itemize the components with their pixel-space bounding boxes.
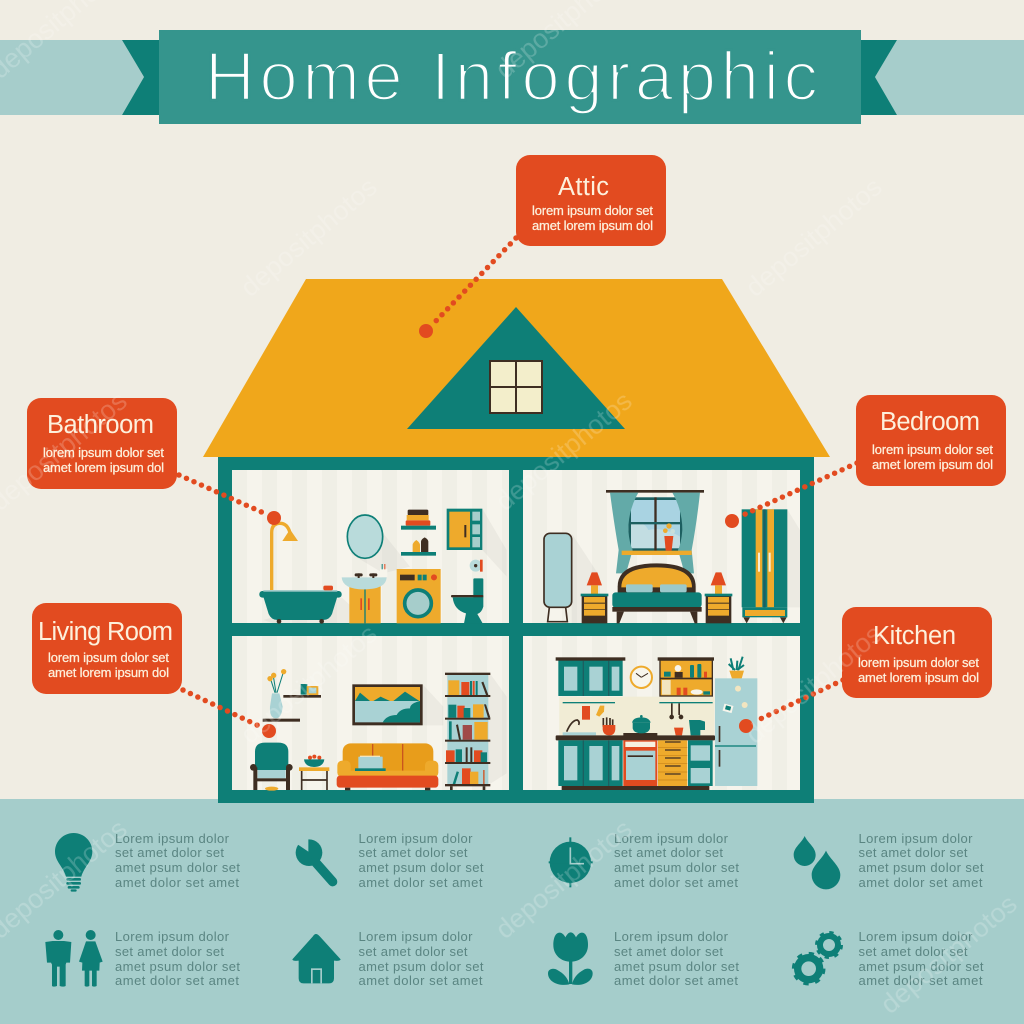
right nightstand with lamp [705,572,732,623]
text block: bulb: Lorem ipsum dolor [115,831,230,846]
wall clock [631,667,652,688]
text block: people: Lorem ipsum dolor [115,929,230,944]
header banner [0,30,1024,124]
text block: gears: set amet dolor set [858,944,968,959]
curtain rod [606,490,704,493]
upper wall shelf [283,684,321,698]
toilet [451,578,483,623]
knife block [603,717,615,735]
connector: kitchen [739,680,843,733]
watermark: depositphotos [490,814,638,945]
room: kitchen [556,657,757,790]
text block: wrench: amet dolor set amet [358,875,483,890]
mirror [544,533,572,622]
text block: house: amet psum dolor set [358,959,484,974]
watermark: depositphotos [490,386,638,517]
title: Home Infographic [205,38,818,115]
callout: bedroom [856,395,1006,486]
text block: people: amet dolor set amet [115,973,239,988]
house [203,279,830,803]
text block: bulb: amet psum dolor set [115,860,240,875]
callout: bedroom: Bedroom [880,408,980,436]
shower [272,523,298,590]
cup [674,728,683,735]
text block: drops: Lorem ipsum dolor [858,831,973,846]
bed [612,563,702,623]
text block: clock: amet dolor set amet [614,875,738,890]
callout: living room: amet lorem ipsum dol [48,665,169,680]
text block: tulip: amet dolor set amet [614,973,738,988]
text block: wrench: amet psum dolor set [358,860,484,875]
callout: bedroom: lorem ipsum dolor set [872,442,993,457]
text block: wrench [358,831,484,890]
hanging rails [563,702,713,720]
drawers [658,740,687,786]
text block: drops: set amet dolor set [858,845,968,860]
text block: wrench: set amet dolor set [358,845,468,860]
potted plant [729,657,744,679]
bathtub [259,586,342,624]
wall cabinet [447,509,482,550]
mirror [347,515,383,558]
connector: attic [419,238,516,338]
right ribbon tail [861,40,1024,115]
text block: clock: set amet dolor set [614,845,723,860]
text block: clock: Lorem ipsum dolor [614,831,729,846]
watermark: depositphotos [740,619,888,750]
window sill and vase [622,523,692,555]
washing machine [397,569,441,623]
roof [203,279,830,457]
bookcase [445,673,490,790]
icon: clock [549,837,593,887]
connector: bathroom [179,475,281,525]
text block: clock [614,831,739,890]
text block: gears: Lorem ipsum dolor [858,929,973,944]
callout: attic [516,155,666,246]
text block: gears: amet psum dolor set [858,959,984,974]
callout: bathroom: amet lorem ipsum dol [43,460,164,475]
bottom icons left half [45,833,341,987]
text block: drops [858,831,984,890]
text block: clock: amet psum dolor set [614,860,739,875]
plinth [562,786,709,790]
open shelf [658,657,714,696]
watermark: depositphotos [740,172,888,303]
vase with flowers [267,669,286,718]
room: bathroom [259,509,507,624]
wardrobe [742,509,787,623]
room: bedroom [544,490,800,623]
icon: light bulb [55,833,92,892]
text block: tulip: Lorem ipsum dolor [614,929,729,944]
sink [342,564,387,623]
callout: bathroom: Bathroom [47,411,154,439]
fridge [715,678,757,786]
soft shadows [352,673,507,785]
text block: house: set amet dolor set [358,944,468,959]
connector: bedroom [725,463,857,528]
right base cabinet [688,740,713,786]
text block: house: amet dolor set amet [358,973,483,988]
watermark: depositphotos [235,619,383,750]
callout: kitchen: amet lorem ipsum dol [858,670,979,685]
lower cabinets [558,740,623,786]
icon: gears [793,932,842,984]
towel shelf [401,510,436,530]
text block: tulip: amet psum dolor set [614,959,739,974]
text block: wrench: Lorem ipsum dolor [358,831,473,846]
text block: bulb [115,831,240,890]
text block: house [358,929,484,988]
laptop on sofa [355,756,386,771]
callout: bathroom: lorem ipsum dolor set [43,445,164,460]
icon: small house [292,934,341,983]
text block: house: Lorem ipsum dolor [358,929,473,944]
callout: kitchen: Kitchen [873,622,956,650]
bottle shelf [401,537,436,556]
callout: attic: lorem ipsum dolor set [532,203,653,218]
text block: gears: amet dolor set amet [858,973,983,988]
text block: tulip [614,929,739,988]
title plate [159,30,861,124]
callout: attic: amet lorem ipsum dol [532,218,653,233]
callout: kitchen: lorem ipsum dolor set [858,655,979,670]
kettle [689,720,705,735]
callout: living room: Living Room [38,618,173,646]
dotted connectors [179,238,857,738]
bottom icons right half [548,836,842,985]
text block: bulb: set amet dolor set [115,845,224,860]
icon: man and woman [45,930,103,987]
left nightstand with lamp [581,572,608,623]
text block: gears [858,929,984,988]
text block: people: amet psum dolor set [115,959,240,974]
cooking pot [623,715,657,736]
text block: people [115,929,240,988]
connector: living room [183,690,276,738]
bottom info band [0,799,1024,1024]
left ribbon tail [0,40,159,115]
watermark: depositphotos [235,172,383,303]
upper cabinets [556,657,625,696]
icon: tulip [548,932,593,985]
soft shadows [572,509,800,623]
oven [623,740,657,786]
callout: living room: lorem ipsum dolor set [48,650,169,665]
callout: kitchen [842,607,992,698]
toilet paper [470,560,483,572]
icon: wrench [292,834,333,882]
sofa [337,743,438,790]
dormer window [489,360,543,414]
watermark: depositphotos [875,889,1023,1020]
window [628,497,683,551]
text block: tulip: set amet dolor set [614,944,723,959]
lower wall shelf [263,719,300,722]
soft shadows [263,509,507,623]
room: living room [250,669,507,791]
callout: attic: Attic [558,173,609,201]
counter top [556,735,715,740]
text block: drops: amet dolor set amet [858,875,983,890]
side table with fruit bowl [299,755,329,790]
callout: bathroom [27,398,177,489]
callout: living room [32,603,182,694]
text block: drops: amet psum dolor set [858,860,984,875]
picture [352,684,423,725]
backsplash [559,697,714,735]
info text blocks [115,831,984,988]
armchair [250,743,293,791]
tap and sink [563,720,596,735]
callout: bedroom: amet lorem ipsum dol [872,457,993,472]
icon: water drops [794,836,840,889]
text block: bulb: amet dolor set amet [115,875,239,890]
dormer [407,307,625,429]
house walls [218,457,814,803]
text block: people: set amet dolor set [115,944,224,959]
curtains [610,493,700,573]
